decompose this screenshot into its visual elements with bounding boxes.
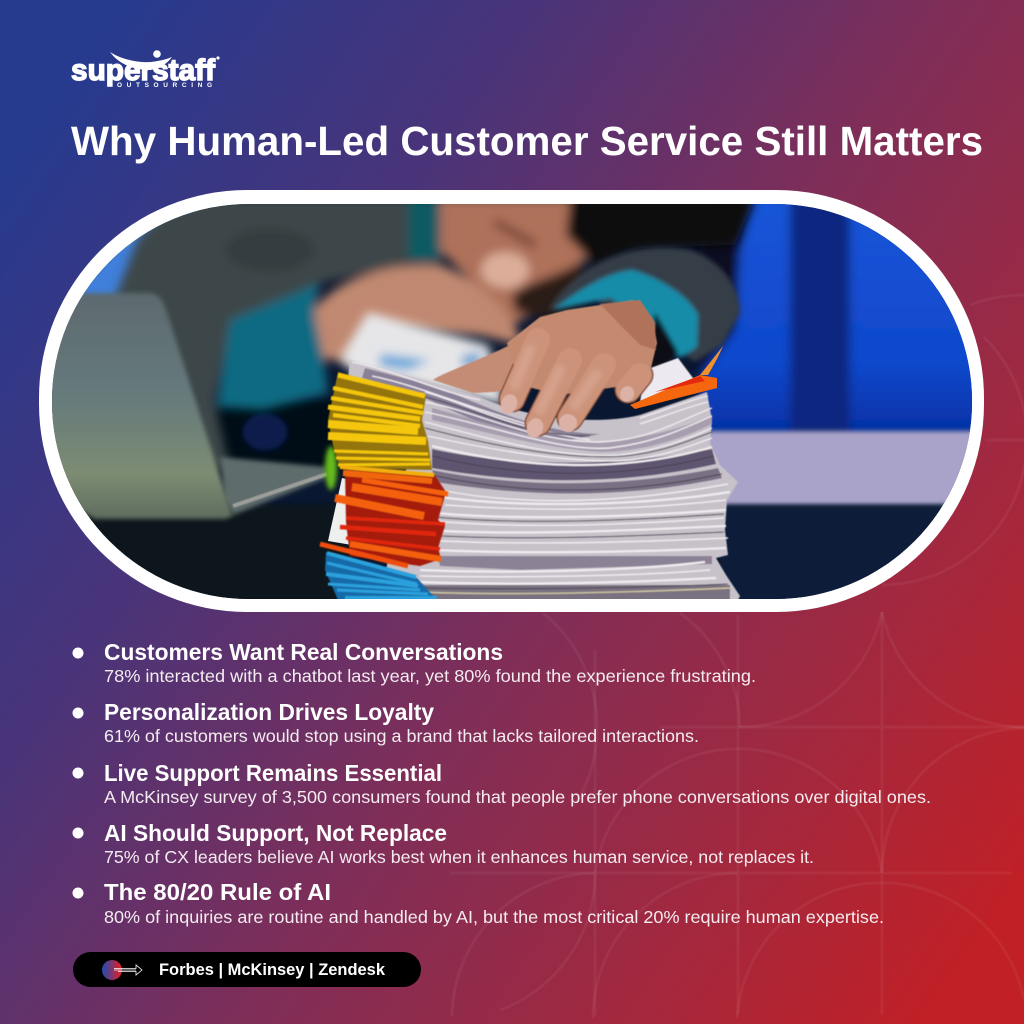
item 5: 80/20 rule: The 80/20 Rule of AI (104, 879, 331, 905)
hair (566, 198, 755, 265)
title: Why Human-Led Customer Service Still Matters (71, 118, 983, 164)
background arc pattern (450, 295, 1024, 1018)
item 4: AI should support (72, 820, 814, 867)
item 3: live support: A McKinsey survey of 3,500 consumers found that people prefer phone conversations over digital ones. (104, 787, 931, 807)
photo frame: white stadium (39, 190, 984, 612)
white document behind stack (340, 312, 505, 405)
item 4: AI should support: 75% of CX leaders believe AI works best when it enhances human service, not replaces it. (104, 847, 814, 867)
laptop front edge (233, 474, 327, 506)
blue tabs (325, 552, 437, 600)
green blur by stack (325, 446, 337, 490)
photo: stack of paperwork (40, 195, 990, 606)
person, blurred (116, 198, 755, 470)
item 3: live support: Live Support Remains Essential (104, 760, 442, 786)
item 1: real conversations: Customers Want Real Conversations (104, 639, 503, 665)
laptop (40, 293, 327, 519)
blue wall left (80, 210, 200, 300)
teal collar (408, 198, 442, 262)
item 5: 80/20 rule (72, 879, 884, 927)
laptop screen (40, 293, 233, 519)
item 5: 80/20 rule: 80% of inquiries are routine and handled by AI, but the most critical 20% require human expertise. (104, 907, 884, 927)
right teal cuff (553, 270, 698, 358)
dark sheet gaps (420, 397, 728, 589)
fingernails (498, 384, 636, 440)
knuckle highlights (515, 350, 596, 410)
shadow bands (362, 368, 730, 600)
item 1: real conversations (72, 639, 756, 686)
yellow tabs (328, 372, 432, 470)
item 4: AI should support: AI Should Support, Not Replace (104, 820, 447, 846)
item 2: personalization (72, 699, 699, 746)
left teal cuff (217, 283, 328, 410)
fingers (512, 340, 640, 423)
white sheets left edge (328, 478, 350, 544)
logo: superstaff outsourcing (71, 50, 220, 89)
blue wall right (700, 195, 990, 435)
logo wordmark: superstaff (71, 54, 216, 87)
logo registered mark (216, 56, 220, 60)
thumb (433, 345, 520, 393)
laptop keyboard and base (220, 457, 327, 515)
stack body (348, 360, 740, 600)
left forearm (314, 264, 522, 362)
face (440, 198, 590, 330)
hand back (507, 300, 657, 395)
sources text: Forbes | McKinsey | Zendesk (159, 961, 386, 979)
jacket (116, 198, 412, 470)
hand on papers (433, 300, 657, 440)
item 1: real conversations: 78% interacted with a chatbot last year, yet 80% found the experience frustrating. (104, 666, 756, 686)
logo swoosh (110, 52, 172, 70)
lavender table edge (705, 431, 980, 505)
paper stack (348, 360, 740, 600)
item 3: live support (72, 760, 931, 807)
bullet list (72, 639, 931, 927)
logo ball (153, 50, 161, 58)
white page behind hand right (640, 358, 696, 402)
orange and red tabs (320, 467, 448, 566)
item 2: personalization: 61% of customers would stop using a brand that lacks tailored interactions. (104, 726, 699, 746)
dark wrist gap (651, 312, 680, 368)
icon: gradient ball with arrow (102, 960, 142, 980)
sheet edges (352, 362, 730, 594)
finger shadows (512, 340, 640, 423)
item 2: personalization: Personalization Drives Loyalty (104, 699, 434, 725)
photo backdrop (52, 204, 972, 599)
sources pill (73, 952, 421, 987)
orange flag top right (630, 346, 723, 409)
dark table (52, 400, 980, 606)
logo subtitle: OUTSOURCING (117, 82, 212, 89)
right sleeve (548, 248, 740, 378)
